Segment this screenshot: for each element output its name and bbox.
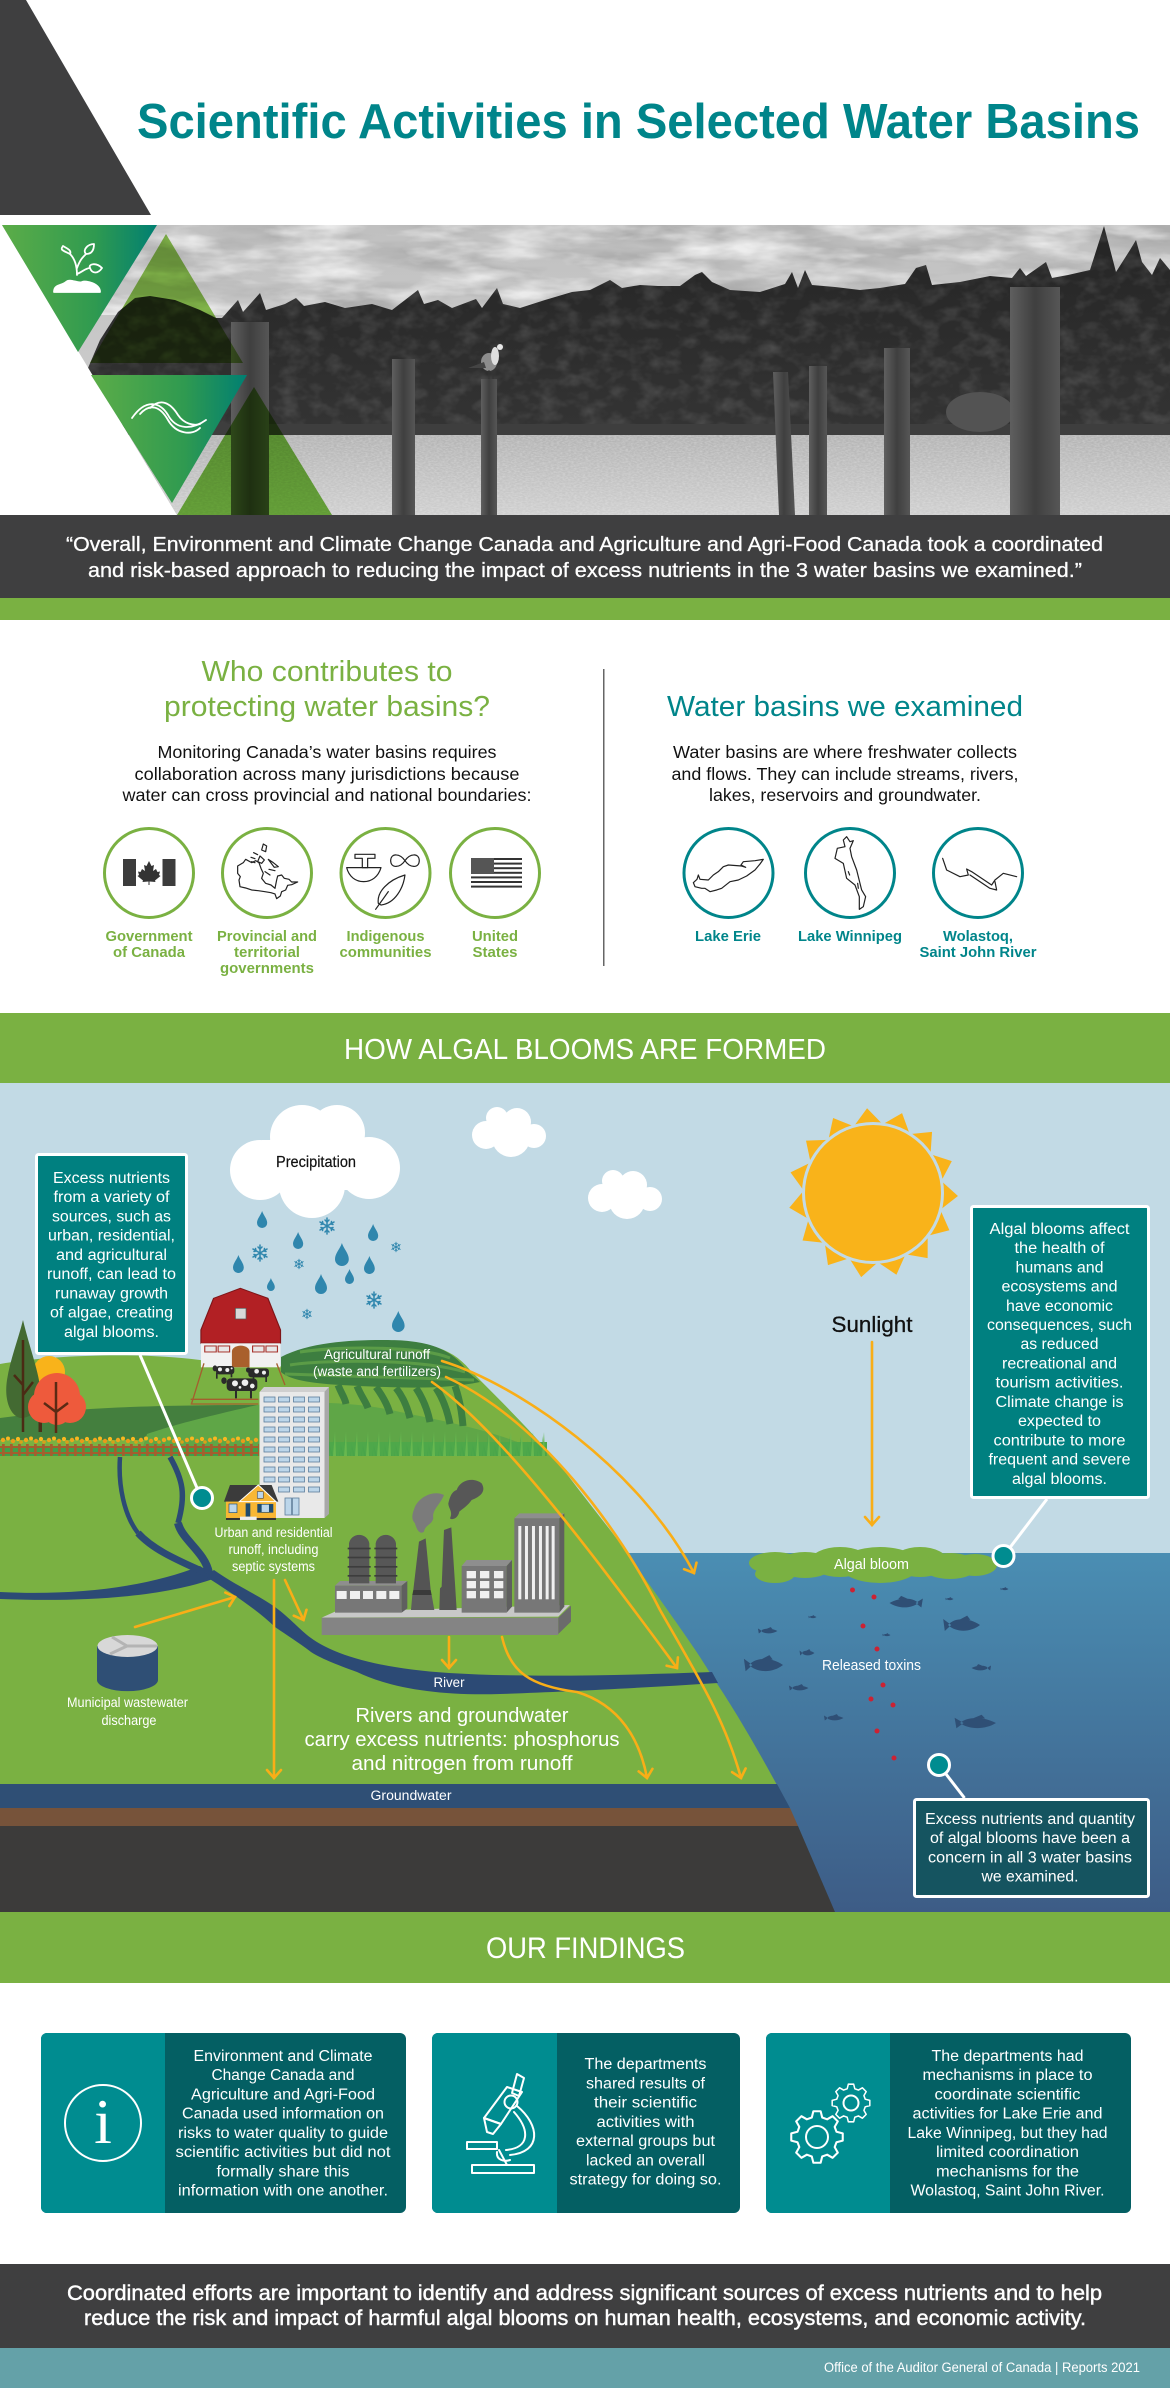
callout: excess nutrients <box>36 1154 212 1508</box>
footer band <box>0 2348 1170 2388</box>
apartment building <box>260 1387 329 1518</box>
labels: contributors: governments <box>220 961 314 977</box>
trees <box>6 1320 86 1433</box>
icon: microscope <box>467 2074 534 2173</box>
callout: excess nutrients: sources, such as <box>52 1208 171 1226</box>
released toxins label: Released toxins <box>822 1657 921 1674</box>
heading: water basins: Water basins we examined <box>667 691 1023 723</box>
callout: excess nutrients: algal blooms. <box>64 1324 159 1341</box>
card 3 text: activities for Lake Erie and <box>912 2106 1102 2122</box>
band: algal blooms heading <box>0 1013 1170 1083</box>
barn <box>201 1288 281 1367</box>
seagull <box>468 344 503 379</box>
callout: health and economic effects: the health of <box>1014 1240 1105 1257</box>
callout: health and economic effects: frequent and severe <box>988 1452 1130 1468</box>
title: Scientific Activities in Selected Water Basins <box>137 95 1140 149</box>
callout: health and economic effects: have economic <box>1006 1298 1113 1315</box>
labels: contributors: of Canada <box>113 945 186 961</box>
card 2 text: external groups but <box>576 2133 716 2150</box>
wastewater tank <box>97 1635 158 1691</box>
diagram: how algal blooms form <box>0 1083 1170 1912</box>
land: hills and shore <box>0 1341 777 1785</box>
quote band <box>0 515 1170 598</box>
heading: who contributes <box>164 656 490 723</box>
house <box>224 1485 278 1520</box>
callout: concern in all basins: of algal blooms have been a <box>930 1830 1130 1847</box>
land labels: (waste and fertilizers) <box>313 1364 441 1379</box>
icon: map of Canada <box>222 828 312 918</box>
text: rivers and groundwater: Rivers and groundwater <box>356 1705 569 1727</box>
card 1 text: scientific activities but did not <box>176 2144 391 2161</box>
icon: gears <box>791 2084 870 2163</box>
card 1 text: risks to water quality to guide <box>178 2125 388 2142</box>
labels: contributors: Provincial and <box>217 929 317 945</box>
card 1 text: Canada used information on <box>182 2106 384 2122</box>
card 3 text: mechanisms for the <box>936 2164 1079 2180</box>
panel: water basins <box>667 691 1037 961</box>
fence and flowers <box>0 1436 259 1456</box>
groundwater label: Groundwater <box>370 1788 452 1803</box>
sun <box>787 1107 959 1279</box>
green triangle overlays <box>2 225 332 515</box>
card 2 text: The departments <box>584 2056 707 2073</box>
band: our findings heading: OUR FINDINGS <box>486 1932 685 1965</box>
icon: Lake Erie <box>684 828 773 918</box>
cows and paddock <box>191 1363 285 1404</box>
labels: contributors: Government <box>106 929 193 945</box>
farm field on hill <box>281 1340 480 1426</box>
labels: contributors: United <box>472 929 518 945</box>
intro text left: Monitoring Canada’s water basins requires <box>158 742 497 762</box>
callout: excess nutrients: from a variety of <box>54 1189 170 1206</box>
card 3 text: Wolastoq, Saint John River. <box>910 2182 1104 2200</box>
intro text right: and flows. They can include streams, rivers, <box>672 764 1018 784</box>
algal bloom <box>749 1547 997 1583</box>
card 2 text: their scientific <box>594 2094 697 2112</box>
card 1 text: Change Canada and <box>212 2067 354 2084</box>
callout: excess nutrients: Excess nutrients <box>53 1170 170 1187</box>
callout: excess nutrients: runaway growth <box>55 1286 168 1302</box>
river <box>0 1457 718 1694</box>
labels: contributors <box>106 929 518 977</box>
intro text right <box>672 742 1018 805</box>
land labels: Municipal wastewater <box>67 1695 188 1710</box>
band: our findings heading <box>0 1912 1170 1983</box>
rain and snow <box>233 1211 405 1332</box>
heading: who contributes: protecting water basins? <box>164 691 490 723</box>
labels: water basins: Saint John River <box>920 945 1037 961</box>
callout: concern in all basins <box>914 1754 1148 1896</box>
card 3 text: coordinate scientific <box>934 2086 1081 2104</box>
icon: Indigenous symbols <box>341 828 430 918</box>
land labels: discharge <box>102 1713 156 1728</box>
quote text: “Overall, Environment and Climate Change Canada and Agriculture and Agri-Food Canada took a coordinated <box>66 533 1103 556</box>
photo posts <box>231 287 1060 515</box>
conclusion text: Coordinated efforts are important to identify and address significant sources of excess nutrients and to help <box>67 2281 1102 2305</box>
land labels <box>67 1347 441 1728</box>
callout: health and economic effects: recreational and <box>1002 1356 1117 1372</box>
cloud: precipitation <box>230 1105 400 1218</box>
finding card 1 <box>41 2033 406 2213</box>
quote text <box>66 533 1103 582</box>
text: rivers and groundwater <box>304 1705 620 1775</box>
icon: Wolastoq river <box>934 828 1022 918</box>
algal bloom label: Algal bloom <box>834 1556 909 1573</box>
labels: contributors: communities <box>340 945 432 961</box>
land labels: Urban and residential <box>214 1525 332 1540</box>
intro text right: Water basins are where freshwater collects <box>673 742 1017 762</box>
callout: excess nutrients: urban, residential, <box>48 1228 175 1244</box>
cloud: small right <box>588 1170 662 1219</box>
card 2 text: strategy for doing so. <box>570 2172 722 2188</box>
precipitation label: Precipitation <box>276 1154 356 1171</box>
card 2 text: lacked an overall <box>586 2152 705 2170</box>
card 3 text: The departments had <box>932 2048 1084 2065</box>
quote text: and risk-based approach to reducing the impact of excess nutrients in the 3 water basins we examined.” <box>88 559 1082 582</box>
callout: excess nutrients: of algae, creating <box>50 1304 173 1322</box>
card 3 text: Lake Winnipeg, but they had <box>908 2125 1108 2142</box>
conclusion text <box>67 2281 1102 2330</box>
groundwater layer <box>0 1784 835 1912</box>
card 1 text <box>176 2048 391 2200</box>
icon: information <box>65 2085 141 2161</box>
callout: excess nutrients: runoff, can lead to <box>47 1266 176 1283</box>
icon: plant <box>54 244 102 292</box>
labels: contributors: States <box>472 945 518 961</box>
callout: health and economic effects: Climate change is <box>996 1394 1124 1411</box>
callout: concern in all basins: we examined. <box>980 1868 1078 1886</box>
card 1 text: information with one another. <box>178 2182 388 2200</box>
callout: health and economic effects <box>972 1206 1148 1566</box>
callout: health and economic effects: humans and <box>1016 1260 1104 1276</box>
callout: concern in all basins: concern in all 3 water basins <box>928 1850 1132 1866</box>
labels: water basins: Lake Winnipeg <box>798 929 902 945</box>
grass strip <box>325 1430 547 1456</box>
intro text right: lakes, reservoirs and groundwater. <box>709 785 981 805</box>
panel: who contributes <box>104 656 540 977</box>
icon: information: i <box>94 2086 112 2157</box>
factory <box>322 1480 571 1635</box>
band: algal blooms heading: HOW ALGAL BLOOMS ARE FORMED <box>344 1034 826 1066</box>
footer band: Office of the Auditor General of Canada | Reports 2021 <box>824 2360 1140 2375</box>
callout: excess nutrients: and agricultural <box>56 1247 167 1264</box>
land labels: Agricultural runoff <box>324 1347 430 1362</box>
sunlight label: Sunlight <box>832 1312 912 1337</box>
labels: water basins: Lake Erie <box>695 929 761 945</box>
card 1 text: formally share this <box>216 2164 350 2180</box>
runoff arrows <box>135 1361 741 1778</box>
labels: contributors: territorial <box>234 945 300 961</box>
callout: health and economic effects: algal blooms. <box>1012 1471 1107 1488</box>
dark green field band <box>0 1405 257 1440</box>
callout: health and economic effects: ecosystems and <box>1002 1278 1118 1296</box>
icon: Canadian flag <box>104 828 194 918</box>
arrow: sunlight <box>871 1342 873 1525</box>
header: decorative dark trapezoid <box>0 0 151 215</box>
labels: water basins: Wolastoq, <box>943 929 1013 945</box>
icon: Lake Winnipeg <box>806 828 894 918</box>
callout: health and economic effects: contribute to more <box>994 1432 1126 1450</box>
conclusion text: reduce the risk and impact of harmful algal blooms on human health, ecosystems, and economic activity. <box>84 2306 1086 2330</box>
labels: contributors: Indigenous <box>346 929 424 945</box>
land labels: septic systems <box>232 1559 315 1574</box>
middle hill <box>140 1403 548 1456</box>
conclusion band <box>0 2264 1170 2348</box>
labels: water basins <box>695 929 1037 961</box>
card 1 text: Environment and Climate <box>194 2048 372 2065</box>
card 3 text: limited coordination <box>936 2144 1079 2161</box>
cloud: small <box>472 1107 546 1157</box>
card 2 text: activities with <box>596 2114 694 2131</box>
intro text left: collaboration across many jurisdictions because <box>134 764 520 784</box>
callout: health and economic effects: consequences, such <box>987 1317 1132 1334</box>
card 2 text <box>570 2056 722 2188</box>
toxin dots <box>850 1588 896 1760</box>
river label: River <box>434 1675 465 1690</box>
intro text left: water can cross provincial and national boundaries: <box>121 785 531 805</box>
fish <box>744 1587 1008 1728</box>
text: rivers and groundwater: carry excess nutrients: phosphorus <box>304 1729 620 1751</box>
heading: who contributes: Who contributes to <box>202 656 452 688</box>
finding card 2 <box>432 2033 740 2213</box>
callout: health and economic effects: Algal blooms affect <box>990 1221 1130 1238</box>
card 2 text: shared results of <box>586 2076 706 2092</box>
callout: health and economic effects: expected to <box>1018 1413 1101 1430</box>
callout: concern in all basins: Excess nutrients and quantity <box>925 1811 1135 1828</box>
icon: US flag <box>450 828 540 918</box>
text: rivers and groundwater: and nitrogen from runoff <box>352 1753 573 1775</box>
callout: health and economic effects: as reduced <box>1020 1336 1098 1353</box>
land labels: runoff, including <box>228 1542 318 1557</box>
card 1 text: Agriculture and Agri-Food <box>191 2086 375 2104</box>
photo: lake with wooden posts and seagull <box>0 225 1170 515</box>
intro text left <box>121 742 531 805</box>
icon: waves <box>132 402 206 433</box>
card 3 text: mechanisms in place to <box>922 2067 1092 2084</box>
callout: health and economic effects: tourism activities. <box>996 1374 1124 1392</box>
finding card 3 <box>766 2033 1131 2213</box>
card 3 text <box>908 2048 1108 2200</box>
